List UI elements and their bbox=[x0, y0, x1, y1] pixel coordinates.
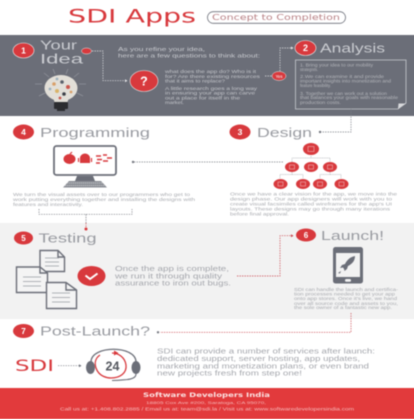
intro text: here are a few questions to think about: bbox=[118, 54, 261, 60]
note card bbox=[296, 60, 406, 109]
step 5 badge: 5 bbox=[21, 234, 26, 243]
body text: features and interactivity. bbox=[13, 202, 83, 207]
body text: SDI can handle the launch and certifica- bbox=[294, 287, 399, 292]
panel: programming bbox=[13, 124, 196, 223]
heading: programming: Programming bbox=[40, 126, 150, 140]
footer bbox=[0, 388, 414, 419]
step 3 badge: 3 bbox=[238, 127, 243, 137]
question text: what does the app do? Who is it bbox=[165, 69, 257, 74]
question text: out a place for itself in the bbox=[165, 96, 241, 100]
question text: market. bbox=[165, 100, 184, 105]
note card: that balances your goals with reasonable bbox=[300, 95, 399, 100]
body text: marketing and monetization plans, or even brand bbox=[157, 363, 369, 370]
icon: check mark bbox=[78, 266, 106, 286]
icon: light bulb bbox=[35, 69, 86, 111]
step 4 badge bbox=[13, 124, 34, 140]
step 6 badge: 6 bbox=[304, 231, 309, 240]
heading: post-launch: Post-Launch? bbox=[40, 324, 150, 339]
question text: in ensuring your app can carve bbox=[165, 90, 256, 96]
body text: onto app stores. Once it's live, we hand bbox=[294, 296, 398, 301]
body text: tion processes needed to get your app bbox=[294, 291, 396, 296]
note card: 2.We can examine it and provide bbox=[300, 74, 385, 79]
question text: A little research goes a long way bbox=[165, 86, 258, 91]
intro text bbox=[118, 47, 261, 60]
heading: your idea: Idea bbox=[40, 50, 83, 66]
body text: work putting everything together and installing the designs with bbox=[13, 197, 196, 202]
body text: new projects fresh from step one! bbox=[157, 371, 302, 378]
subtitle pill bbox=[208, 12, 346, 23]
question text: for? Are there existing resources bbox=[165, 74, 260, 79]
heading: design: Design bbox=[257, 126, 312, 140]
body text bbox=[294, 287, 399, 310]
title: SDI Apps bbox=[68, 6, 196, 28]
body text: we run it through quality bbox=[114, 273, 223, 280]
panel: testing and launch bbox=[0, 223, 414, 319]
diagram: wireframe tree bbox=[274, 143, 348, 189]
body text: create visual facsimiles called wireframes for the app's UI bbox=[230, 202, 392, 206]
body text: dedicated support, server hosting, app updates, bbox=[157, 356, 360, 363]
icon: 24 hour support headset: 24 bbox=[106, 360, 119, 374]
body text: Once the app is complete, bbox=[115, 266, 229, 273]
connector dot bbox=[319, 131, 321, 133]
body text bbox=[157, 348, 375, 378]
step 6 badge bbox=[296, 228, 316, 242]
icon: question mark: ? bbox=[140, 74, 148, 88]
icon: question mark bbox=[130, 70, 158, 92]
panel: post-launch bbox=[13, 324, 375, 380]
step 7 badge bbox=[13, 324, 34, 338]
note card: strategists. bbox=[300, 67, 318, 72]
note card: 3. Together we can work out a solution bbox=[300, 91, 388, 96]
body text: the sole owner of a fantastic new app. bbox=[294, 305, 392, 310]
question text bbox=[165, 69, 260, 105]
step 1 badge bbox=[13, 43, 34, 58]
body text: before final approval. bbox=[230, 212, 289, 216]
body text bbox=[114, 266, 231, 288]
heading: your idea bbox=[40, 38, 83, 66]
body text: Once we have a clear vision for the app, we move into the bbox=[230, 192, 398, 196]
panel: design bbox=[230, 124, 398, 216]
connector: analysis to design bbox=[321, 109, 351, 132]
step 4 badge: 4 bbox=[21, 127, 26, 137]
heading: testing: Testing bbox=[38, 232, 97, 246]
body text bbox=[13, 192, 196, 207]
connector: idea to question bbox=[82, 48, 128, 82]
step 2 badge bbox=[295, 40, 316, 56]
body text bbox=[230, 192, 398, 216]
yes marker and connector: Yes bbox=[276, 74, 282, 79]
heading: your idea: Your bbox=[40, 38, 77, 52]
intro text: As you refine your idea, bbox=[118, 47, 206, 53]
panel: idea and analysis bbox=[0, 35, 414, 116]
footer: Software Developers India bbox=[143, 392, 270, 399]
body text: assurance to iron out bugs. bbox=[115, 280, 231, 288]
icon: 24 hour support headset bbox=[86, 349, 140, 380]
heading: analysis: Analysis bbox=[320, 42, 385, 56]
body text: layouts. These designs may go through many iterations bbox=[230, 206, 391, 212]
connector: design to programming bbox=[132, 161, 284, 163]
step 7 badge: 7 bbox=[21, 326, 26, 336]
connector: testing to launch bbox=[237, 234, 294, 276]
step 5 badge bbox=[14, 232, 33, 244]
note card: 1. Bring your idea to our mobility bbox=[300, 62, 374, 68]
step 1 badge: 1 bbox=[21, 46, 26, 56]
body text: over all source code and assets to you, bbox=[294, 301, 398, 306]
step 2 badge: 2 bbox=[303, 43, 308, 53]
icon: phone with rocket bbox=[333, 247, 363, 284]
icon: documents bbox=[16, 250, 76, 308]
question text: that it aims to replace? bbox=[165, 78, 226, 84]
sdi label: SDI bbox=[15, 356, 54, 375]
heading: launch: Launch! bbox=[321, 229, 384, 243]
connector: launch to post-launch bbox=[157, 313, 351, 333]
icon: computer with platforms bbox=[54, 146, 116, 188]
footer: 18805 Cox Ave #200, Saratoga, CA 95070, bbox=[146, 400, 266, 405]
note card: production costs. bbox=[300, 100, 341, 105]
step 3 badge bbox=[230, 124, 250, 140]
subtitle pill: Concept to Completion bbox=[212, 13, 340, 22]
yes marker and connector bbox=[265, 46, 294, 80]
connector: programming to testing bbox=[39, 209, 132, 223]
body text: SDI can provide a number of services after launch: bbox=[157, 348, 375, 356]
note card: feature feasibility. bbox=[300, 83, 331, 88]
arrow: sdi to support bbox=[58, 364, 82, 367]
body text: We turn the visual assets over to our programmers who get to bbox=[13, 192, 191, 197]
footer: Call us at: +1.408.802.2885 / Email us at: team@sdi.la / Visit us at: www.softwaredevelopersindia.com bbox=[60, 406, 354, 412]
body text: design phase. Our app designers will work with you to bbox=[230, 196, 393, 202]
note card: important insights into monetization and bbox=[300, 78, 392, 84]
